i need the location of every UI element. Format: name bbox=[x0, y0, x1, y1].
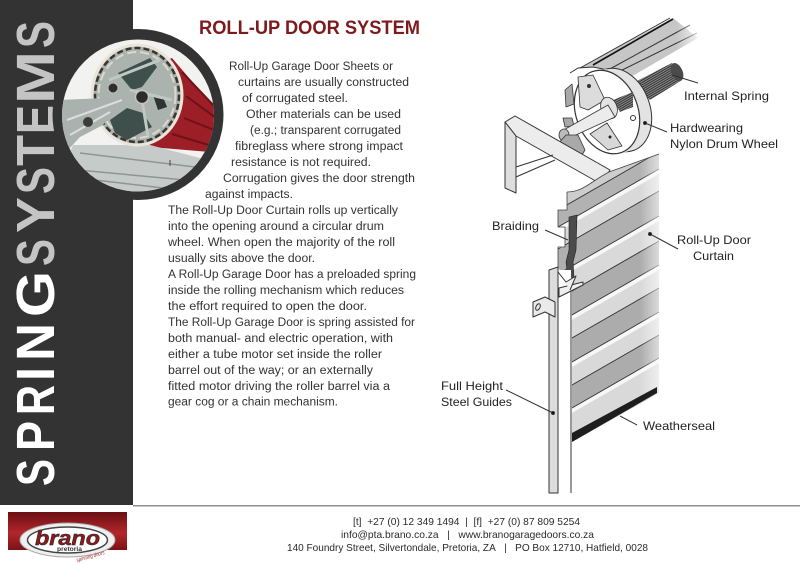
text block: description: usually sits above the door. bbox=[168, 253, 315, 265]
text block: description: resistance is not required. bbox=[231, 157, 371, 169]
text block: description: fibreglass where strong impact bbox=[235, 141, 404, 153]
text block: description: The Roll-Up Garage Door is spring assisted for bbox=[168, 317, 415, 329]
text block: description: of corrugated steel. bbox=[242, 93, 348, 105]
text block: description: The Roll-Up Door Curtain rolls up vertically bbox=[168, 205, 398, 217]
footer contact details: 140 Foundry Street, Silvertondale, Pretoria, ZA | PO Box 12710, Hatfield, 0028 bbox=[287, 542, 648, 554]
text block: description: A Roll-Up Garage Door has a preloaded spring bbox=[168, 269, 416, 281]
text block: description: the effort required to open the door. bbox=[168, 301, 367, 313]
text block: description: against impacts. bbox=[205, 189, 293, 201]
text block: description: either a tube motor set inside the roller bbox=[168, 349, 382, 361]
vertical brand title: M bbox=[6, 51, 66, 104]
text block: description: Other materials can be used bbox=[246, 109, 401, 121]
internal spring bbox=[633, 61, 686, 100]
weatherseal strip bbox=[572, 387, 657, 442]
text block: description: fitted motor driving the roller barrel via a bbox=[168, 381, 391, 393]
curtain bbox=[558, 154, 660, 442]
vertical brand title bbox=[6, 21, 66, 486]
braiding bbox=[566, 215, 577, 278]
footer contact details: [t] +27 (0) 12 349 1494 | [f] +27 (0) 87 809 5254 bbox=[353, 516, 580, 528]
vertical brand title: S bbox=[6, 167, 66, 194]
guides bbox=[533, 267, 583, 494]
text block: description: (e.g.; transparent corrugated bbox=[250, 125, 401, 137]
diagram: roll-up door mechanism bbox=[505, 18, 700, 494]
footer rule bbox=[133, 505, 800, 506]
wall bracket bbox=[505, 116, 610, 193]
text block: description: Roll-Up Garage Door Sheets or bbox=[229, 61, 393, 73]
text block: description: barrel out of the way; or an externally bbox=[168, 365, 373, 377]
text block: description: wheel. When open the majority of the roll bbox=[167, 237, 395, 249]
vertical brand title: P bbox=[6, 421, 66, 451]
photo: roller drum in dark ring bbox=[50, 29, 230, 200]
labels: Full Height bbox=[441, 379, 504, 393]
vertical brand title: S bbox=[6, 459, 66, 486]
logo: pretoria bbox=[57, 546, 82, 553]
labels: Hardwearing bbox=[670, 121, 743, 135]
labels: Curtain bbox=[693, 249, 734, 263]
footer contact details bbox=[287, 516, 648, 554]
vertical brand title: Y bbox=[6, 197, 66, 233]
vertical brand title: N bbox=[6, 323, 66, 361]
logo: spinning doors bbox=[76, 550, 106, 564]
vertical brand title: R bbox=[6, 385, 66, 415]
labels: Braiding bbox=[492, 219, 539, 233]
labels: Roll-Up Door bbox=[677, 233, 751, 247]
text block: description: Corrugation gives the door strength bbox=[223, 173, 415, 185]
labels: Nylon Drum Wheel bbox=[670, 137, 778, 151]
vertical brand title: S bbox=[6, 21, 66, 48]
text block: description bbox=[167, 61, 416, 408]
labels: Internal Spring bbox=[684, 89, 769, 103]
vertical brand title: I bbox=[6, 367, 66, 381]
text block: description: into the opening around a circular drum bbox=[168, 221, 384, 233]
vertical brand title: E bbox=[6, 105, 66, 134]
title: ROLL-UP DOOR SYSTEM bbox=[199, 18, 420, 39]
labels bbox=[441, 89, 778, 433]
text block: description: curtains are usually constructed bbox=[238, 77, 409, 89]
drum wheel bbox=[557, 59, 663, 163]
vertical brand title: S bbox=[6, 239, 66, 266]
vertical brand title: G bbox=[6, 271, 66, 317]
footer contact details: info@pta.brano.co.za | www.branogaragedoors.co.za bbox=[341, 529, 594, 541]
leader lines bbox=[506, 75, 698, 425]
logo bbox=[8, 512, 127, 564]
labels: Steel Guides bbox=[441, 395, 512, 409]
labels: Weatherseal bbox=[643, 419, 715, 433]
text block: description: gear cog or a chain mechanism. bbox=[168, 396, 338, 408]
text block: description: inside the rolling mechanism which reduces bbox=[168, 285, 404, 297]
logo: brano bbox=[35, 528, 100, 550]
vertical brand title: T bbox=[6, 135, 66, 166]
roller housing bbox=[570, 18, 700, 82]
text block: description: both manual- and electric operation, with bbox=[168, 333, 393, 345]
panel: dark sidebar bbox=[0, 0, 133, 505]
